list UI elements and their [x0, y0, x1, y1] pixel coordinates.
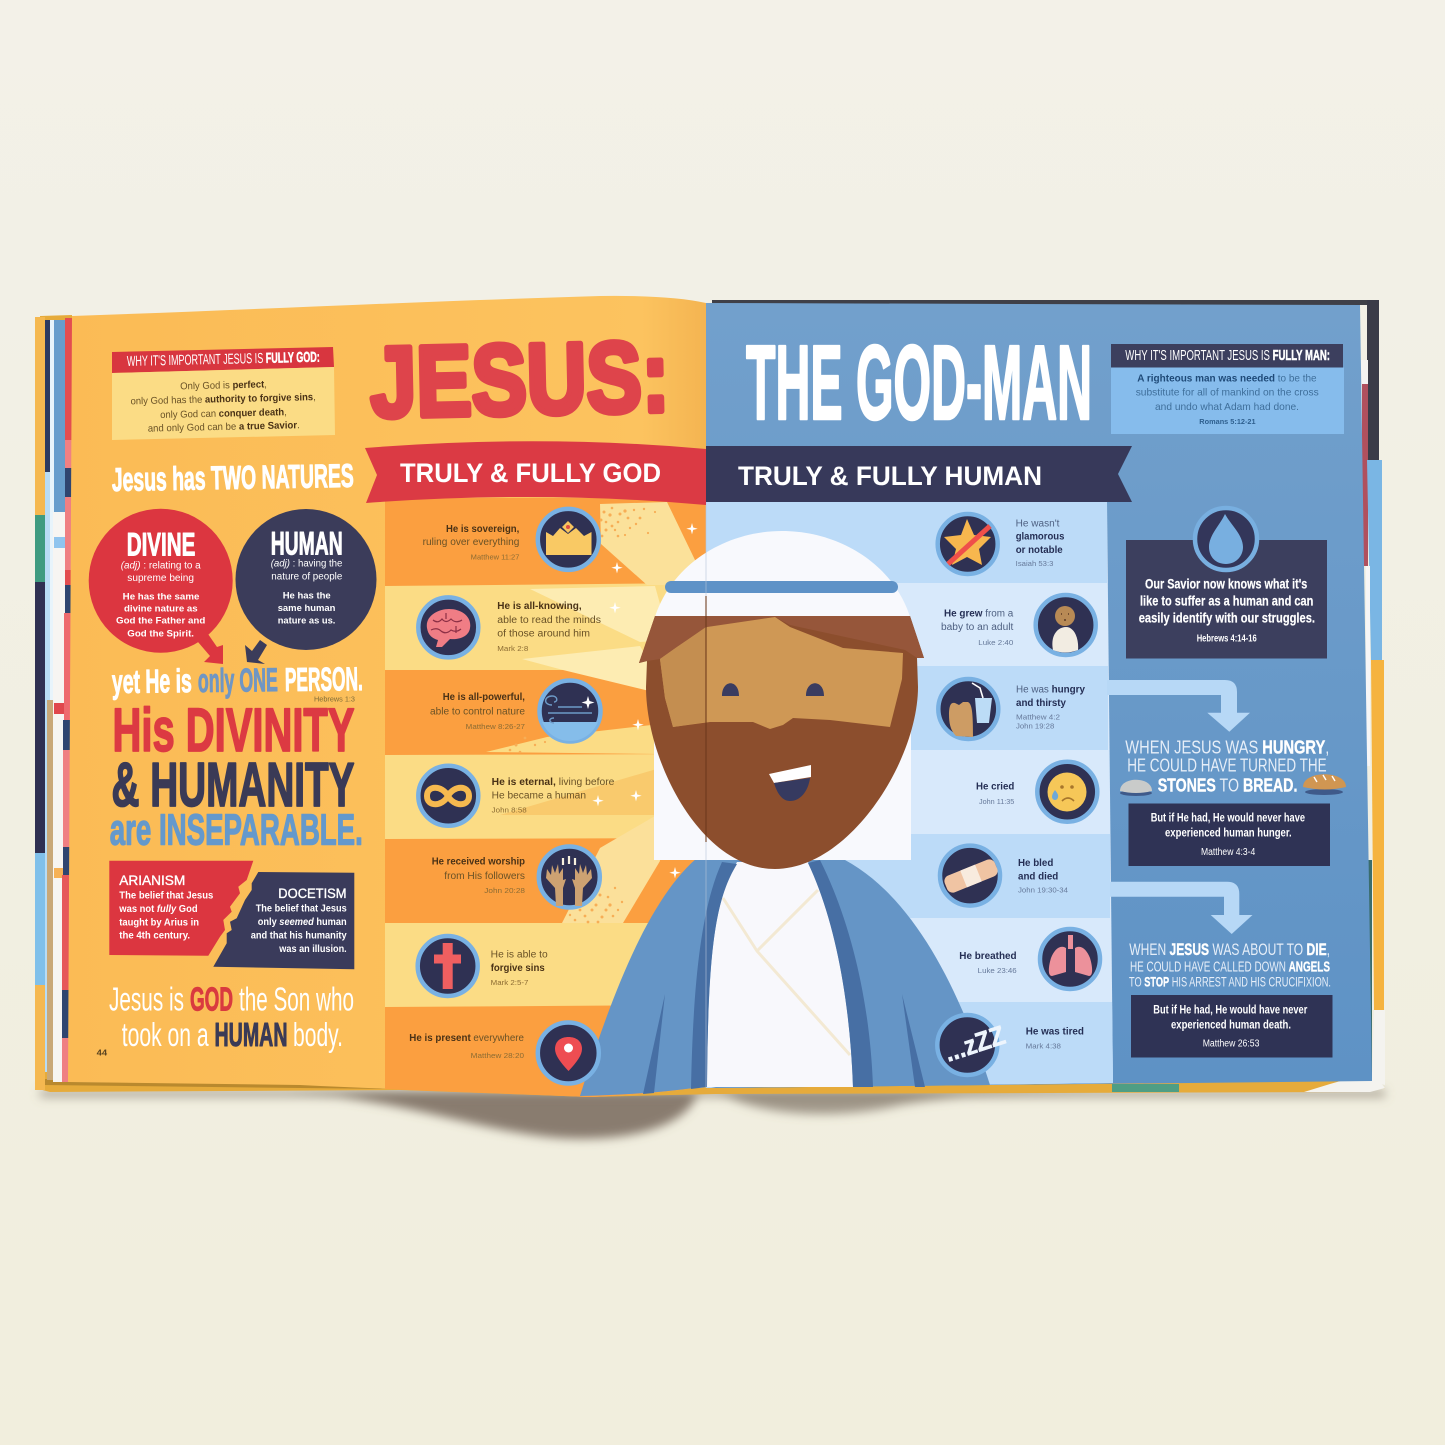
icon: crossed star	[938, 514, 998, 574]
headband	[665, 581, 898, 593]
item: sovereign: He is sovereign,	[446, 524, 520, 535]
panel: human attribute rows	[706, 502, 1113, 1088]
callout: why fully man: Romans 5:12-21	[1199, 417, 1256, 426]
callout: Arianism: taught by Arius in	[119, 917, 199, 928]
statement: God the Son: body.	[293, 1016, 343, 1053]
panel: right page, fully man	[706, 303, 1372, 1088]
callout: Arianism: ARIANISM	[119, 873, 185, 888]
statement: inseparable: & HUMANITY	[112, 751, 354, 820]
item: sovereign: Matthew 11:27	[471, 552, 519, 561]
item: all-powerful: Matthew 8:26-27	[466, 722, 525, 731]
item: eternal: John 8:58	[492, 805, 527, 814]
heading: two natures: Jesus has TWO NATURES	[111, 457, 354, 498]
box: human hunger: Matthew 4:3-4	[1201, 847, 1256, 858]
callout: why fully man: WHY IT'S IMPORTANT JESUS IS FULLY MAN:	[1125, 348, 1330, 364]
callout: about to die	[1129, 940, 1332, 1058]
definition: divine	[89, 509, 233, 664]
box: human death	[1131, 995, 1332, 1058]
icon: crying face	[1037, 762, 1097, 822]
item: worship: He received worship	[432, 857, 525, 868]
box: human hunger: But if He had, He would never have	[1151, 811, 1305, 825]
item: hungry	[938, 679, 1085, 739]
heading: JESUS: JESUS:	[369, 321, 670, 439]
definition: divine: DIVINE	[127, 527, 195, 563]
statement: one person: PERSON.	[285, 660, 363, 698]
item: hungry: and thirsty	[1016, 698, 1066, 709]
item: all-knowing: of those around him	[497, 629, 590, 640]
definition: divine: supreme being	[127, 573, 194, 584]
item: eternal	[418, 766, 615, 826]
illustration: Jesus figure	[580, 500, 990, 1096]
item: sovereign	[423, 509, 599, 570]
item: worship: from His followers	[444, 871, 525, 882]
callout: about to die: HE COULD HAVE CALLED DOWN ANGELS	[1130, 959, 1330, 976]
skin in book gutter shade	[660, 627, 706, 727]
item: not glamorous: Isaiah 53:3	[1016, 559, 1053, 568]
callout: Docetism: was an illusion.	[278, 944, 347, 955]
face and beard	[639, 616, 924, 869]
callout: why fully man	[1111, 344, 1344, 434]
icon: water drop	[1195, 508, 1257, 570]
callout: Savior knows suffering: like to suffer as a human and can	[1140, 593, 1313, 609]
box: human death: But if He had, He would have never	[1153, 1002, 1308, 1016]
stipple dots	[509, 507, 656, 923]
robe lapels	[643, 860, 925, 1094]
box: human hunger	[1128, 804, 1330, 866]
skin	[660, 617, 903, 729]
arrow: to death callout	[1110, 882, 1252, 934]
item: grew: baby to an adult	[941, 622, 1014, 633]
callout: why fully man: and undo what Adam had done.	[1155, 402, 1299, 413]
callout: why fully man: A righteous man was needed to be the	[1137, 374, 1317, 385]
panel: God attribute rows	[385, 498, 706, 1097]
item: cried: He cried	[976, 781, 1014, 792]
box: human hunger: experienced human hunger.	[1165, 826, 1292, 840]
item: grew: Luke 2:40	[978, 638, 1013, 647]
item: present everywhere: He is present everywhere	[409, 1033, 524, 1044]
statement: God the Son: GOD	[190, 981, 233, 1018]
callout: stones to bread: HE COULD HAVE TURNED THE	[1127, 755, 1327, 776]
statement: one person: only ONE	[198, 661, 278, 699]
item: all-powerful	[430, 680, 602, 746]
statement: inseparable: His DIVINITY	[112, 696, 354, 764]
statement: God the Son: Jesus is	[109, 981, 184, 1018]
callout: why fully God: Only God is perfect,	[180, 379, 267, 392]
callout: Arianism: The belief that Jesus	[119, 891, 214, 902]
page number: 44	[97, 1049, 108, 1058]
callout: why fully God: only God has the authority to forgive sins,	[130, 392, 316, 407]
callout: why fully God	[112, 347, 335, 440]
callout: Docetism: and that his humanity	[251, 930, 347, 941]
statement: one person: yet He is	[112, 662, 192, 700]
item: eternal: He is eternal, living before	[492, 777, 615, 788]
callout: Savior knows suffering	[1126, 508, 1327, 658]
item: bled: He bled	[1018, 858, 1053, 869]
item: not glamorous	[938, 514, 1065, 574]
icon: crown	[538, 509, 599, 570]
book cover and page edges	[35, 300, 1385, 1097]
callout: stones to bread: STONES TO BREAD.	[1158, 775, 1297, 796]
eyes	[722, 683, 824, 696]
item: bled	[940, 846, 1068, 906]
item: not glamorous: glamorous	[1016, 532, 1065, 542]
item: cried: John 11:35	[979, 797, 1014, 806]
spine stitching	[705, 596, 707, 842]
definition: human: HUMAN	[271, 525, 343, 561]
callout: Savior knows suffering: Hebrews 4:14-16	[1197, 634, 1257, 645]
item: tired: He was tired	[1026, 1026, 1084, 1037]
icon: raised hands	[539, 846, 600, 908]
definition: human: nature as us.	[278, 615, 335, 626]
definition: divine: God the Spirit.	[127, 628, 194, 639]
book shadow	[40, 1090, 1385, 1139]
item: bled: John 19:30-34	[1018, 886, 1068, 894]
statement: God the Son: HUMAN	[214, 1016, 288, 1053]
callout: Arianism: was not fully God	[118, 904, 198, 915]
shirt	[707, 862, 853, 1087]
definition: human: same human	[278, 603, 336, 614]
ribbon: truly and fully God	[365, 441, 706, 505]
item: sovereign: ruling over everything	[423, 537, 519, 548]
robe	[580, 840, 990, 1096]
item: forgive sins	[418, 936, 548, 996]
item: breathed	[959, 929, 1100, 989]
shirt folds	[723, 890, 850, 1055]
icon: bread	[1303, 774, 1346, 795]
definition: divine: divine nature as	[124, 604, 198, 615]
item: breathed: He breathed	[959, 951, 1017, 962]
item: present everywhere	[409, 1022, 599, 1084]
callout: Docetism: only seemed human	[258, 917, 347, 928]
callout: about to die: WHEN JESUS WAS ABOUT TO DIE,	[1129, 940, 1330, 959]
definition: human: (adj) : having the	[271, 559, 343, 570]
item: bled: and died	[1018, 871, 1058, 882]
statement: one person: Hebrews 1:3	[314, 695, 355, 704]
item: not glamorous: He wasn't	[1016, 518, 1060, 529]
icon: wind and waves	[538, 680, 602, 746]
item: forgive sins: He is able to	[491, 949, 548, 960]
statement: inseparable	[110, 696, 363, 854]
item: hungry: John 19:28	[1016, 722, 1054, 730]
definition: divine: (adj) : relating to a	[121, 560, 201, 571]
icon: baby	[1036, 595, 1096, 655]
sparkles	[592, 523, 698, 878]
icon: stone	[1120, 780, 1152, 796]
box: human death: Matthew 26:53	[1203, 1039, 1260, 1050]
definition: divine: God the Father and	[116, 616, 205, 627]
item: not glamorous: or notable	[1016, 545, 1063, 556]
item: hungry: He was hungry	[1016, 685, 1085, 696]
item: all-knowing: Mark 2:8	[497, 644, 528, 653]
icon: location pin	[538, 1022, 599, 1084]
head cloth	[654, 531, 911, 860]
arrow: to hungry callout	[1107, 680, 1250, 732]
item: all-knowing: He is all-knowing,	[497, 601, 582, 612]
definition: human: He has the	[283, 590, 331, 601]
item: tired: Mark 4:38	[1026, 1042, 1061, 1051]
callout: Arianism: the 4th century.	[119, 930, 190, 941]
definition: human: nature of people	[271, 571, 343, 582]
item: grew	[941, 595, 1096, 655]
callout: why fully God: and only God can be a true Savior.	[148, 420, 300, 435]
icon: lungs	[1040, 929, 1100, 989]
item: all-powerful: able to control nature	[430, 706, 525, 717]
callout: Docetism: DOCETISM	[278, 886, 347, 901]
item: tired	[937, 1015, 1084, 1075]
callout: about to die: TO STOP HIS ARREST AND HIS CRUCIFIXION.	[1129, 974, 1331, 990]
hair highlight	[639, 616, 924, 663]
icon: bandage	[940, 846, 1000, 906]
item: all-powerful: He is all-powerful,	[443, 692, 525, 703]
callout: Docetism: The belief that Jesus	[256, 904, 347, 915]
callout: Savior knows suffering: Our Savior now knows what it's	[1145, 575, 1307, 591]
mouth	[769, 765, 811, 801]
panel: left page, fully God	[68, 296, 706, 1097]
item: all-knowing: able to read the minds	[497, 615, 601, 626]
item: grew: He grew from a	[944, 609, 1014, 620]
icon: bread and drink	[938, 679, 998, 739]
box: human death: experienced human death.	[1171, 1017, 1291, 1031]
icon: brain	[418, 597, 478, 657]
item: all-knowing	[418, 597, 601, 657]
statement: God the Son: the Son who	[239, 981, 354, 1018]
definition: divine: He has the same	[123, 592, 199, 603]
callout: why fully man: substitute for all of mankind on the cross	[1136, 388, 1319, 399]
ribbon: truly and fully human	[706, 446, 1132, 502]
icon: cross	[418, 936, 478, 996]
item: cried	[976, 762, 1097, 822]
item: forgive sins: Mark 2:5-7	[491, 978, 528, 987]
item: breathed: Luke 23:46	[978, 966, 1017, 975]
statement: one person	[112, 660, 363, 704]
icon: zzz: ...zZZ	[941, 1020, 1009, 1068]
statement: God the Son: took on a	[122, 1016, 209, 1053]
callout: stones to bread	[1120, 736, 1346, 866]
statement: God the Son	[109, 981, 354, 1053]
callout: why fully God: only God can conquer death,	[160, 407, 287, 421]
callout: stones to bread: WHEN JESUS WAS HUNGRY,	[1125, 736, 1329, 757]
item: forgive sins: forgive sins	[491, 963, 545, 974]
definition: human	[236, 509, 376, 664]
ribbon: truly and fully human: TRULY & FULLY HUMAN	[738, 461, 1042, 491]
item: worship: John 20:28	[484, 886, 525, 895]
callout: Arianism	[109, 861, 253, 956]
callout: why fully God: WHY IT'S IMPORTANT JESUS IS FULLY GOD:	[127, 350, 320, 370]
item: hungry: Matthew 4:2	[1016, 712, 1060, 721]
item: eternal: He became a human	[492, 790, 586, 802]
icon: infinity	[418, 766, 478, 826]
item: worship	[432, 846, 600, 908]
statement: inseparable: are INSEPARABLE.	[110, 806, 363, 854]
callout: Savior knows suffering: easily identify with our struggles.	[1139, 610, 1315, 626]
ribbon: truly and fully God: TRULY & FULLY GOD	[400, 458, 661, 488]
item: present everywhere: Matthew 28:20	[471, 1051, 524, 1060]
callout: Docetism	[213, 872, 354, 969]
